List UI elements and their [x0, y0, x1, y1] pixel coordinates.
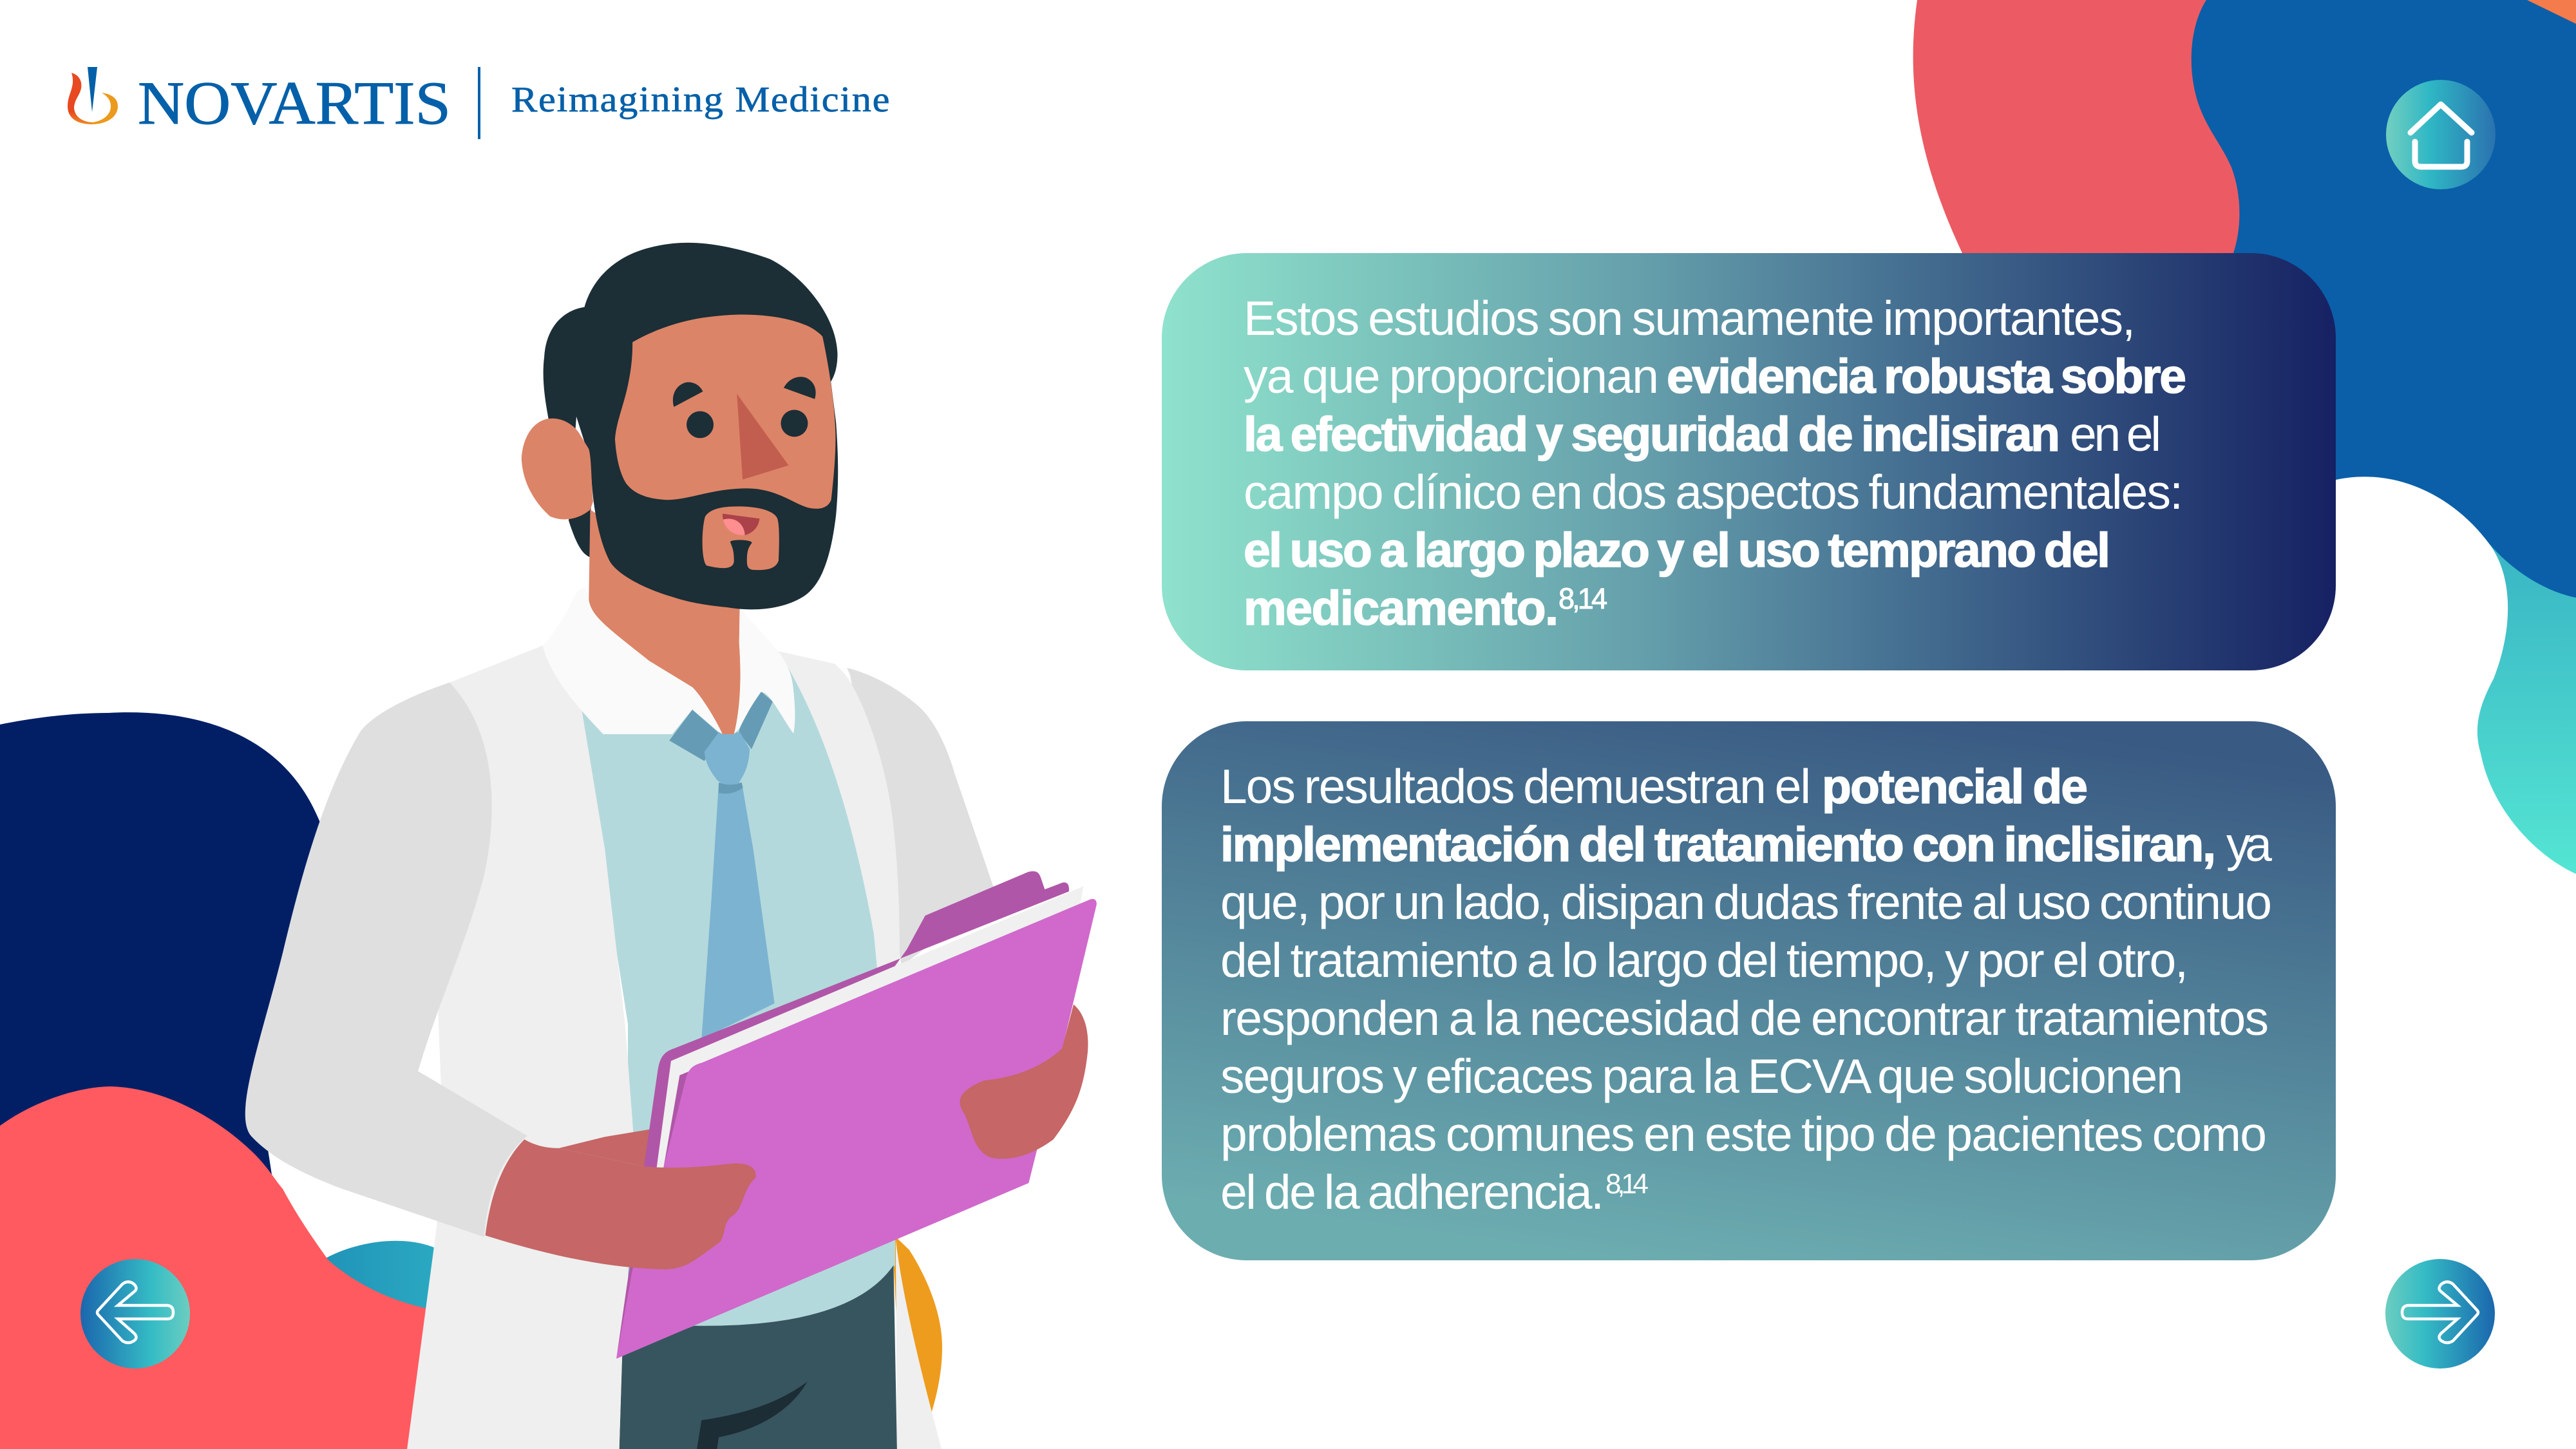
text block: panel 1: [1244, 291, 2186, 635]
text block: panel 1: el uso a largo plazo y el uso temprano del: [1244, 523, 2110, 577]
icon: back arrow button: [80, 1259, 190, 1368]
text block: panel 2: implementación del tratamiento con inclisiran,: [1220, 817, 2216, 871]
back sleeve and shirt: [579, 663, 996, 1326]
tie, sleeve, folder and hands: [245, 683, 1097, 1359]
text block: panel 2: del tratamiento a lo largo del tiempo, y por el otro,: [1220, 933, 2188, 987]
decorative blobs: top right: [1913, 0, 2576, 874]
logo tagline: Reimagining Medicine: [511, 79, 890, 119]
text block: panel 1: ya que proporcionan: [1244, 349, 1659, 403]
text block: panel 2: que, por un lado, disipan dudas frente al uso continuo: [1220, 875, 2272, 929]
icon: novartis flame: [68, 67, 118, 124]
text block: panel 1: evidencia robusta sobre: [1667, 349, 2186, 403]
text block: panel 1: Estos estudios son sumamente importantes,: [1244, 291, 2136, 345]
text block: panel 2: potencial de: [1822, 759, 2088, 813]
text block: panel 2: seguros y eficaces para la ECVA que solucionen: [1220, 1049, 2183, 1103]
panel: results: [1162, 721, 2336, 1260]
head: [522, 243, 838, 734]
trousers and left coat: [407, 645, 897, 1449]
text block: panel 2: el de la adherencia.: [1220, 1165, 1604, 1219]
panel: study importance: [1162, 253, 2336, 670]
text block: panel 2: ya: [2226, 817, 2272, 871]
text block: panel 2: Los resultados demuestran el: [1220, 759, 1811, 813]
text block: panel 2: [1220, 759, 2272, 1219]
text block: panel 1: medicamento.: [1244, 581, 1558, 635]
text block: panel 1: la efectividad y seguridad de inclisiran: [1244, 407, 2060, 461]
text block: panel 2: problemas comunes en este tipo de pacientes como: [1220, 1107, 2267, 1161]
icon: home button: [2386, 80, 2496, 189]
text block: panel 2: responden a la necesidad de encontrar tratamientos: [1220, 991, 2269, 1045]
right coat: [778, 651, 942, 1449]
decorative blobs: bottom left and behind figure: [0, 712, 942, 1449]
logo: [68, 67, 890, 139]
text block: panel 1: 8,14: [1558, 582, 1607, 615]
text block: panel 2: 8,14: [1605, 1168, 1649, 1200]
text block: panel 1: campo clínico en dos aspectos fundamentales:: [1244, 465, 2183, 519]
text block: panel 1: en el: [2070, 407, 2161, 461]
logo wordmark: NOVARTIS: [138, 69, 451, 137]
icon: next arrow button: [2385, 1259, 2495, 1368]
illustration: doctor with folder: [245, 243, 1097, 1449]
